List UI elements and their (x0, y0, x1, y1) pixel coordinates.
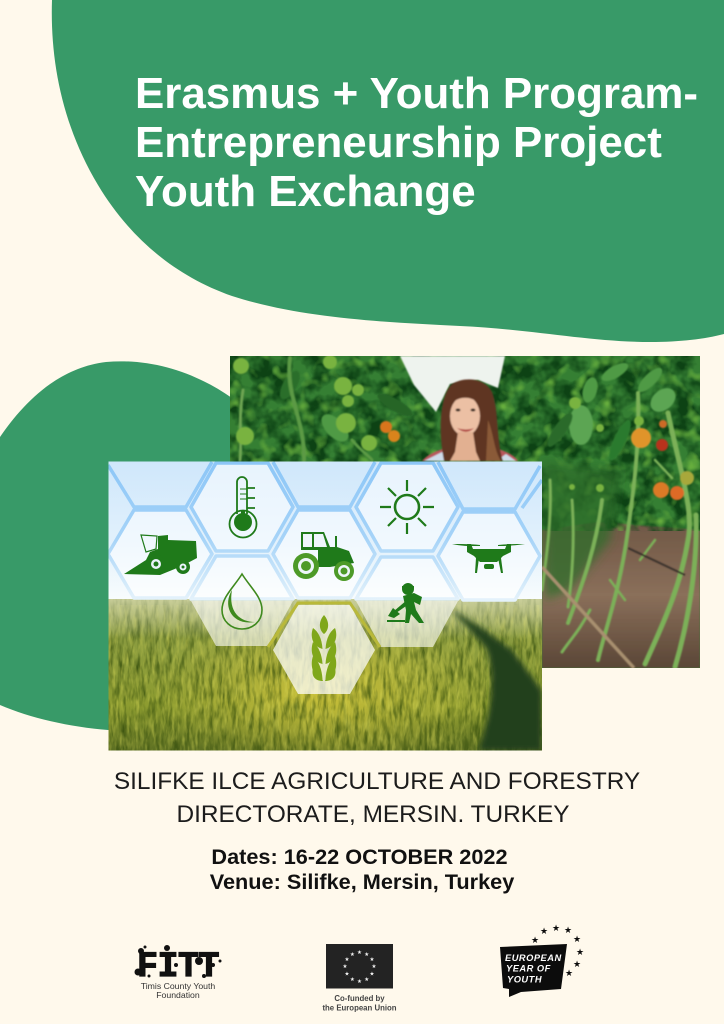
logo: European Year of Youth: YOUTH (507, 974, 542, 984)
logo: co-funded by the European Union: ★ (357, 949, 362, 956)
dates and venue: Dates: 16-22 OCTOBER 2022 (211, 844, 508, 869)
logo: European Year of Youth: ★ (576, 947, 584, 957)
logo: co-funded by the European Union: ★ (350, 976, 355, 983)
logo: co-funded by the European Union (322, 944, 397, 1012)
logo: European Year of Youth: YEAR OF (506, 964, 551, 974)
leaves (276, 359, 680, 462)
dates and venue (210, 844, 514, 894)
title: Erasmus + Youth Program- (135, 69, 698, 118)
icon: farmer digging (387, 583, 424, 623)
venue heading: SILIFKE ILCE AGRICULTURE AND FORESTRY (114, 768, 640, 795)
icon: thermometer (230, 477, 256, 538)
field furrow (450, 608, 542, 751)
logo: co-funded by the European Union: ★ (364, 976, 369, 983)
stems (240, 358, 696, 667)
title: Youth Exchange (135, 167, 476, 216)
icon: wheat (312, 615, 336, 681)
venue heading (114, 768, 640, 828)
logo: co-funded by the European Union: ★ (345, 970, 350, 978)
woman (422, 448, 518, 461)
sky (108, 462, 542, 600)
logo: FITT foundation: Timis County Youth (141, 981, 215, 991)
left green blob (0, 361, 232, 740)
foliage texture (230, 356, 700, 531)
logo: co-funded by the European Union: the European Union (322, 1004, 397, 1012)
icon: drone (452, 544, 525, 573)
logo: co-funded by the European Union: ★ (350, 951, 355, 958)
icon: sun (380, 480, 434, 534)
logo: European Year of Youth: ★ (540, 926, 548, 936)
logo: European Year of Youth: ★ (552, 923, 560, 933)
logo: co-funded by the European Union: ★ (357, 978, 362, 985)
logo: co-funded by the European Union: ★ (345, 956, 350, 963)
icon: tractor (293, 532, 354, 581)
greenhouse roof (400, 356, 505, 412)
soil (542, 522, 700, 668)
venue heading: DIRECTORATE, MERSIN. TURKEY (176, 801, 570, 828)
photo: woman in tomato greenhouse (230, 355, 700, 668)
logo: co-funded by the European Union: ★ (370, 970, 375, 978)
logo: European Year of Youth: ★ (564, 925, 572, 935)
hexagon grid (108, 463, 540, 600)
logo: European Year of Youth: ★ (573, 934, 581, 944)
logo: co-funded by the European Union: Co-funded by (334, 994, 385, 1003)
irrigation hose (542, 567, 634, 668)
tomatoes (233, 355, 694, 500)
logo: European Year of Youth (500, 923, 584, 997)
lower foliage (542, 460, 620, 600)
logo: European Year of Youth: ★ (573, 959, 581, 969)
title (135, 69, 698, 216)
logo: co-funded by the European Union: ★ (364, 951, 369, 958)
icon: combine harvester (124, 535, 197, 575)
photo: smart farming field (108, 462, 542, 775)
logo: FITT foundation (134, 945, 222, 1000)
icon: water drop (222, 574, 262, 629)
logo: European Year of Youth: ★ (531, 935, 539, 945)
lower hexagons (191, 601, 458, 694)
wheat field (108, 599, 542, 751)
logo: FITT foundation: FITT (137, 947, 219, 987)
logo: co-funded by the European Union: ★ (370, 956, 375, 963)
dates and venue: Venue: Silifke, Mersin, Turkey (210, 869, 514, 894)
top partial hexagon lines (108, 462, 542, 509)
top green blob (52, 0, 724, 342)
logo: co-funded by the European Union: ★ (343, 963, 348, 970)
title: Entrepreneurship Project (135, 118, 662, 167)
logo: European Year of Youth: ★ (565, 968, 573, 978)
logo: FITT foundation: Foundation (156, 990, 200, 1000)
logo: co-funded by the European Union: ★ (372, 963, 377, 970)
logo: European Year of Youth: EUROPEAN (505, 953, 562, 963)
